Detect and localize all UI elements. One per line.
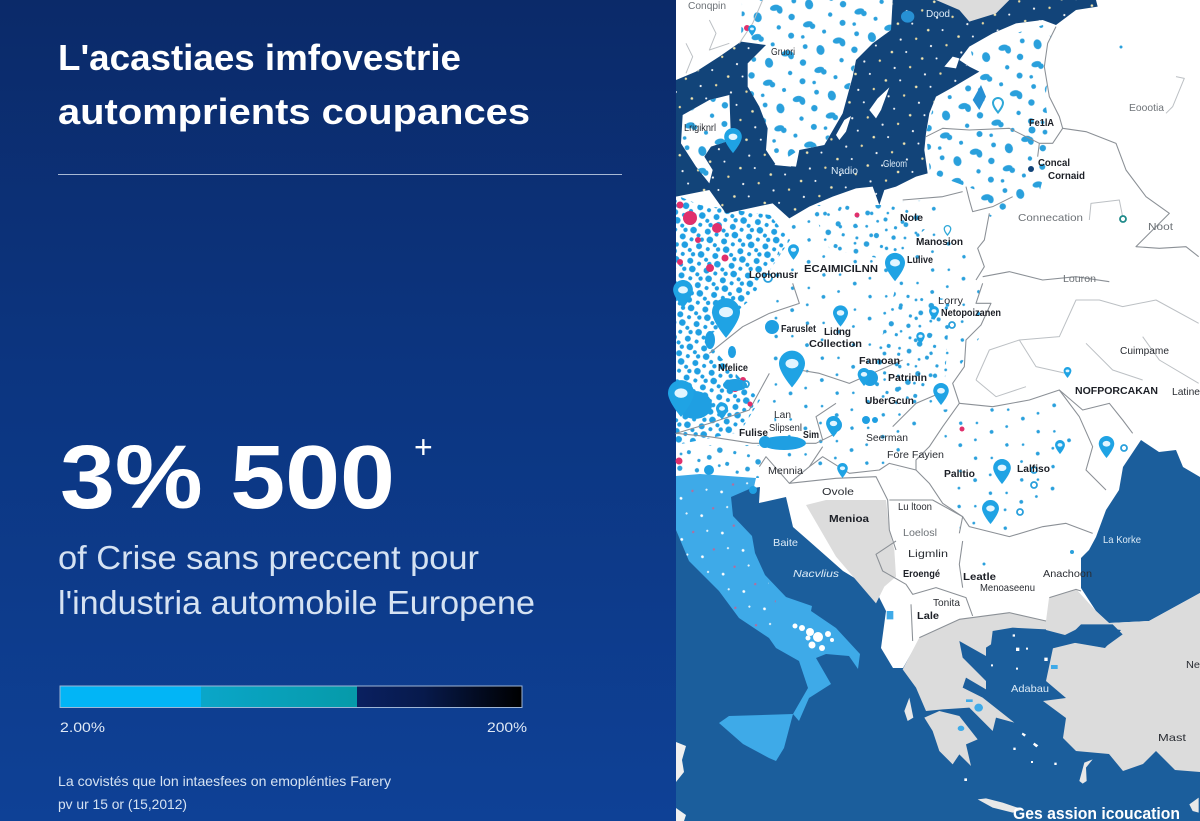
pin — [858, 368, 870, 386]
Baltic sea — [676, 0, 1098, 218]
country borders — [676, 0, 1199, 641]
Adriatic, Mediterranean and Aegean sea — [676, 487, 1200, 821]
pin — [788, 244, 799, 260]
Balkan gray land — [806, 500, 896, 603]
statistic description — [58, 539, 535, 621]
big statistic: 3% 500 — [60, 428, 395, 528]
label: Nacvlius — [793, 568, 840, 580]
scale bar — [60, 686, 522, 708]
label: Fulise — [739, 427, 768, 439]
label: La Korke — [1103, 534, 1141, 546]
label: Faruslet — [781, 323, 816, 335]
pin — [1055, 440, 1065, 454]
pin — [993, 98, 1003, 112]
label: Ligmlin — [908, 548, 948, 560]
pin — [673, 280, 693, 308]
map pins — [668, 25, 1114, 524]
label: Lale — [917, 610, 939, 622]
Black sea — [1081, 440, 1200, 623]
pin — [826, 416, 841, 437]
label: Gleom — [883, 158, 907, 170]
statistic description: of Crise sans preccent pour — [58, 539, 479, 576]
label: Ovole — [822, 486, 854, 498]
Turkey and Thrace — [1043, 589, 1200, 772]
pin — [833, 305, 848, 327]
panel: map — [668, 0, 1200, 821]
label: Famoan — [859, 355, 900, 367]
pin — [668, 380, 694, 417]
label: Lorry — [938, 295, 964, 307]
pin — [993, 459, 1011, 484]
pin — [837, 463, 848, 478]
Italy and Sicily — [676, 474, 860, 761]
Greece — [887, 611, 1199, 813]
label: Cornaid — [1048, 170, 1085, 182]
label: Ne — [1186, 659, 1200, 671]
label: Eroengé — [903, 568, 940, 580]
pin — [885, 253, 905, 281]
pin — [944, 226, 951, 235]
pin — [1064, 367, 1071, 378]
label: Eoootia — [1129, 102, 1164, 114]
label: Loelosl — [903, 527, 937, 539]
label: Nadio — [831, 165, 858, 177]
label: UberGcun — [865, 395, 914, 407]
label: Lan — [774, 409, 791, 421]
label: Noot — [1148, 221, 1173, 233]
label: Lrigiknrl — [684, 122, 716, 134]
label: Slipsenl — [769, 422, 802, 434]
label: Adabau — [1011, 683, 1049, 695]
label: Conqpin — [688, 0, 726, 12]
label: Lidng — [824, 326, 851, 338]
pin — [748, 25, 756, 36]
label: Leatle — [963, 571, 996, 583]
label: Lu ltoon — [898, 501, 932, 513]
label: Fore Fayien — [887, 449, 944, 461]
Peloponnese — [924, 711, 978, 766]
pin — [916, 332, 925, 344]
pin — [982, 500, 999, 524]
label: Manosion — [916, 236, 963, 248]
scale labels — [60, 720, 527, 735]
map labels — [684, 0, 1200, 821]
label: Mast — [1158, 732, 1186, 744]
label: Palitio — [944, 468, 975, 480]
label: Collection — [809, 338, 862, 350]
footnote — [58, 773, 391, 812]
label: Netopoizanen — [941, 307, 1001, 319]
title: automprients coupances — [58, 91, 530, 132]
label: Tonita — [933, 597, 960, 609]
label: Seerman — [866, 432, 908, 444]
label: Concal — [1038, 157, 1070, 169]
title — [58, 37, 530, 132]
statistic description: l'industria automobile Europene — [58, 584, 535, 621]
Aegean and Ionian islands — [904, 698, 1199, 813]
label: Anachoon — [1043, 568, 1092, 580]
label: Nfelice — [718, 362, 748, 374]
dot density: land clusters — [676, 0, 1075, 535]
pin — [724, 128, 742, 153]
label: Gruori — [771, 46, 795, 58]
big statistic: + — [414, 429, 433, 465]
label: Cuimpame — [1120, 345, 1169, 357]
label: Menioa — [829, 513, 869, 525]
label: Mennia — [768, 465, 803, 477]
pin — [1099, 436, 1114, 458]
pin — [933, 383, 949, 405]
label: Nole — [900, 212, 923, 224]
label: Loolonusr — [749, 269, 798, 281]
dense cluster accents — [676, 25, 1127, 566]
label: Fe1lA — [1029, 117, 1054, 129]
label: Menoaseenu — [980, 582, 1035, 594]
label: Lulive — [907, 254, 933, 266]
footnote: La covistés que lon intaesfees on emoplénties Farery — [58, 773, 391, 789]
pin — [712, 298, 740, 338]
panel: left blue summary — [0, 0, 676, 821]
label: Sim — [803, 429, 819, 441]
pin — [716, 402, 728, 420]
label: Connecation — [1018, 212, 1083, 224]
label: Dood — [926, 8, 950, 20]
label: Louron — [1063, 273, 1096, 285]
pin — [929, 306, 939, 320]
label: NOFPORCAKAN — [1075, 385, 1158, 397]
pin — [779, 351, 805, 387]
scale labels: 200% — [487, 720, 527, 735]
title: L'acastiaes imfovestrie — [58, 37, 461, 78]
label: Patrinin — [888, 372, 927, 384]
Sardinia and Corsica coast — [676, 742, 686, 821]
label: ECAIMICILNN — [804, 263, 878, 275]
footnote: pv ur 15 or (15,2012) — [58, 796, 187, 812]
label: Latine — [1172, 386, 1200, 398]
label: Baite — [773, 537, 798, 549]
scale labels: 2.00% — [60, 720, 105, 735]
label: Lalfiso — [1017, 463, 1050, 475]
